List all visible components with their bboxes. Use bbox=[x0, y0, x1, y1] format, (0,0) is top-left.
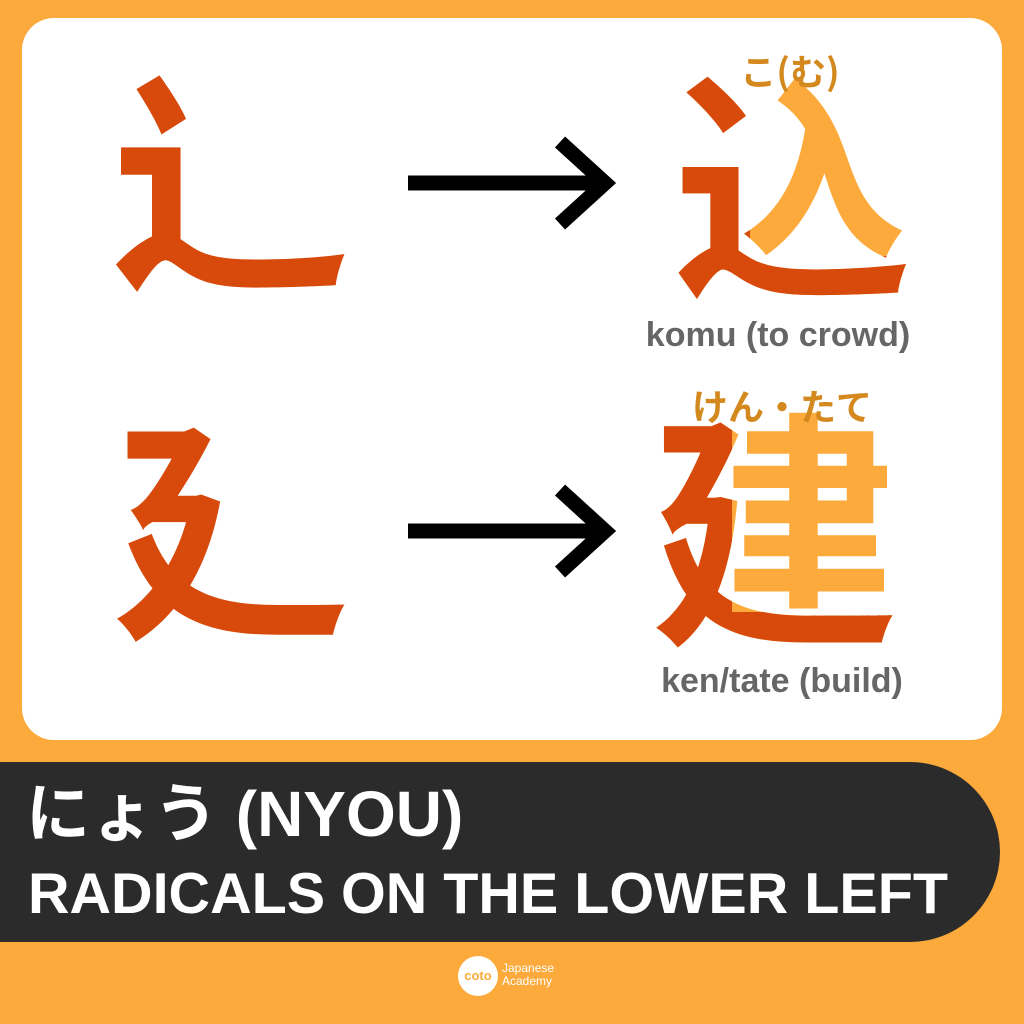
heading: nyou: にょう (NYOU) bbox=[26, 778, 463, 850]
logo: coto japanese academy: coto bbox=[464, 968, 492, 983]
icon: kanji komu: 込 bbox=[672, 3, 912, 350]
furigana: ken tate: けん・たて bbox=[692, 379, 872, 431]
icon: radical shinnyou: 辶 bbox=[110, 0, 350, 342]
arrow: bottom bbox=[408, 490, 605, 572]
label: komu: komu (to crowd) bbox=[646, 316, 910, 354]
icon: kanji komu: 込 bbox=[672, 3, 912, 350]
icon: kanji ken: 建 bbox=[650, 335, 900, 697]
logo: coto japanese academy: Japanese bbox=[502, 961, 554, 975]
heading: subtitle: RADICALS ON THE LOWER LEFT bbox=[28, 862, 948, 926]
logo: coto japanese academy bbox=[458, 956, 554, 996]
icon: kanji komu bbox=[678, 76, 906, 299]
arrow: top bbox=[408, 142, 605, 224]
furigana: komu: こ(む) bbox=[740, 44, 840, 96]
icon: kanji ken bbox=[656, 412, 892, 648]
panel: white card bbox=[22, 18, 1002, 740]
panel: title banner bbox=[0, 762, 1000, 942]
icon: kanji ken: 建 bbox=[650, 335, 900, 697]
logo: coto japanese academy: Academy bbox=[502, 974, 552, 988]
chart: kanji diagram bbox=[110, 0, 912, 700]
icon: radical innyou: 廴 bbox=[110, 345, 350, 692]
label: ken tate: ken/tate (build) bbox=[661, 662, 903, 700]
